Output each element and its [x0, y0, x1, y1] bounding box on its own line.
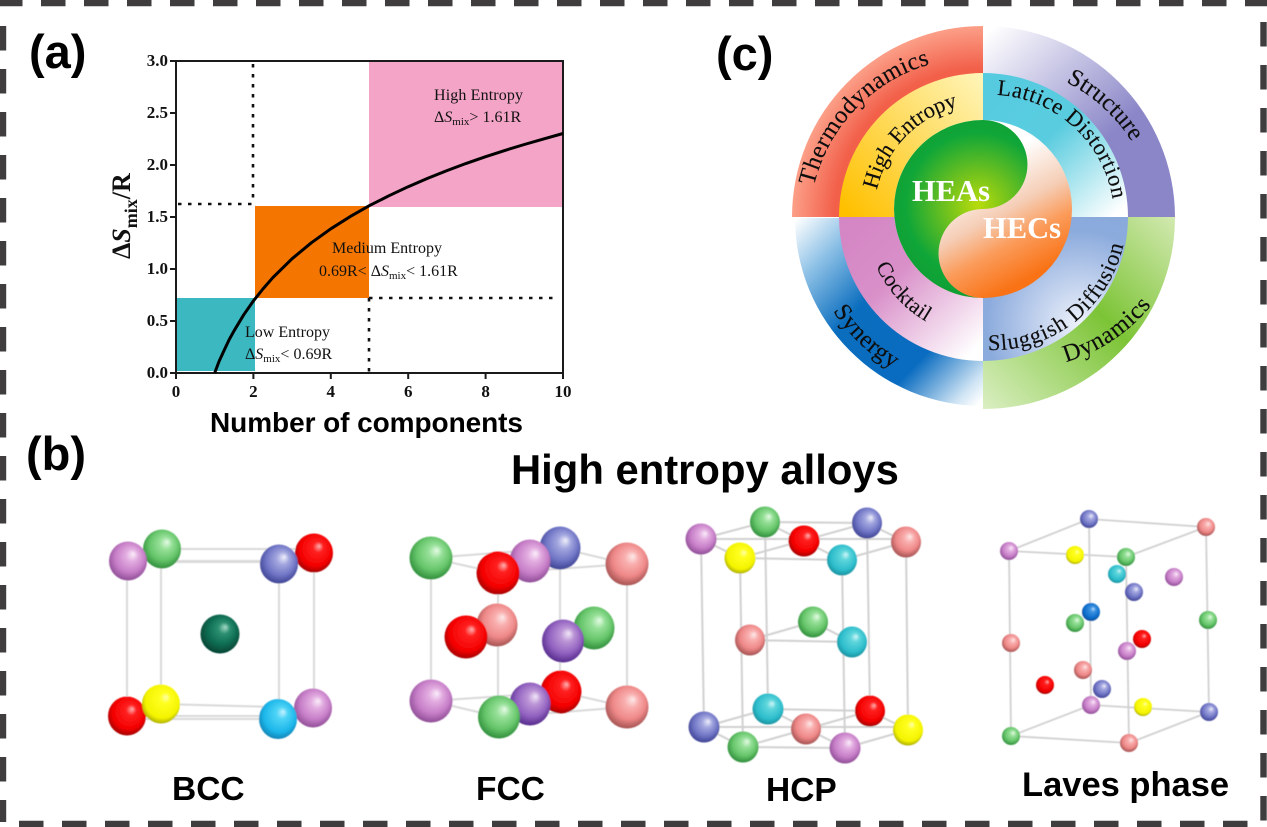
low entropy label: < 0.69R	[280, 346, 332, 363]
y axis title: /R	[107, 173, 136, 200]
y axis title: ΔS	[107, 228, 136, 259]
heading: high entropy alloys: High entropy alloys	[511, 446, 899, 493]
region: medium entropy	[255, 206, 369, 298]
label: Laves phase: Laves phase	[1022, 766, 1229, 804]
crystal: Laves phase	[1000, 510, 1218, 752]
yin-yang centre: HECs	[983, 211, 1061, 245]
outer ring labels: Synergy	[834, 304, 899, 368]
y axis tick labels: 0.5	[147, 311, 168, 330]
medium entropy label: < 1.61R	[406, 263, 458, 280]
x axis tick labels: 10	[554, 382, 572, 401]
y axis tick labels: 2.0	[147, 155, 168, 174]
low entropy label	[245, 324, 332, 365]
high entropy label	[434, 87, 523, 128]
panel: HEA wheel diagram	[792, 26, 1175, 409]
y axis tick labels: 1.0	[147, 259, 168, 278]
region: low entropy	[177, 298, 255, 371]
crystal: BCC	[108, 530, 333, 739]
y axis tick labels	[147, 51, 168, 382]
y axis tick labels: 0.0	[147, 363, 168, 382]
inner ring labels: High Entropy	[862, 96, 955, 190]
x axis tick labels: 2	[249, 382, 258, 401]
medium entropy label: mix	[389, 270, 407, 282]
dotted guide lines	[178, 64, 556, 372]
high entropy label: High Entropy	[434, 87, 523, 104]
inner ring labels: Cocktail	[878, 262, 932, 322]
high entropy label: > 1.61R	[469, 109, 521, 126]
inner ring labels	[862, 80, 1124, 352]
x axis tick labels	[172, 382, 572, 401]
x axis title: Number of components	[210, 407, 523, 438]
outer ring quadrants	[792, 26, 1175, 409]
medium entropy label: 0.69R< ΔS	[319, 263, 389, 280]
panel: entropy chart	[107, 51, 572, 438]
x axis tick labels: 0	[172, 382, 180, 401]
x axis tick labels: 6	[404, 382, 412, 401]
panel label (b): (b)	[26, 427, 86, 480]
crystal: FCC	[410, 526, 648, 738]
outer ring labels	[798, 54, 1150, 368]
inner ring quadrants	[839, 73, 1128, 361]
medium entropy label	[319, 240, 458, 282]
outer ring labels: Structure	[1068, 70, 1140, 140]
outer ring labels: Dynamics	[1061, 299, 1150, 362]
low entropy label: mix	[263, 353, 281, 365]
x axis tick labels: 8	[481, 382, 490, 401]
chart axes frame	[170, 61, 563, 379]
label: BCC: BCC	[172, 771, 245, 808]
region: high entropy	[369, 61, 563, 207]
x axis tick labels: 4	[327, 382, 336, 401]
label: HCP: HCP	[766, 772, 837, 809]
yin-yang centre: HEAs	[912, 174, 990, 208]
inner ring labels: Lattice Distortion	[997, 80, 1122, 199]
crystal: HCP	[686, 506, 923, 764]
panel label (a): (a)	[29, 25, 86, 78]
y axis title: mix	[121, 199, 141, 228]
y axis tick labels: 1.5	[147, 207, 168, 226]
label: FCC: FCC	[476, 771, 545, 808]
panel label (c): (c)	[716, 27, 773, 80]
yin-yang centre	[894, 120, 1072, 298]
high entropy label: ΔS	[434, 109, 452, 126]
entropy curve	[215, 134, 563, 373]
inner ring labels: Sluggish Diffusion	[989, 244, 1124, 352]
high entropy label: mix	[452, 116, 470, 128]
y axis tick labels: 2.5	[147, 103, 168, 122]
medium entropy label: Medium Entropy	[332, 240, 442, 257]
outer ring labels: Thermodynamics	[798, 54, 928, 182]
low entropy label: ΔS	[245, 346, 263, 363]
low entropy label: Low Entropy	[245, 324, 330, 341]
y axis tick labels: 3.0	[147, 51, 168, 70]
